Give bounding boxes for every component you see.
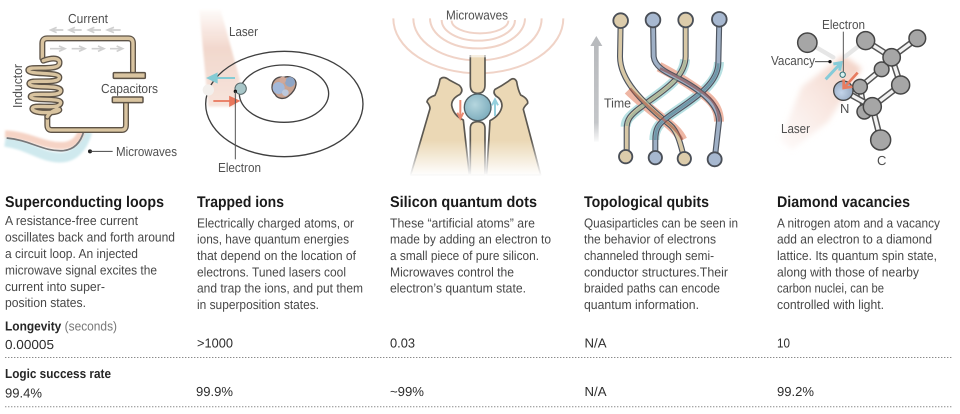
- description: carbon nuclei, can be: [777, 281, 884, 296]
- description: and trap the ions, and put them: [197, 281, 363, 296]
- carbon atoms: [798, 30, 926, 150]
- light arrows: [826, 63, 858, 88]
- label: Electron: Electron: [822, 17, 865, 32]
- description: a circuit loop. An injected: [5, 246, 138, 261]
- lattice bonds: [843, 38, 917, 140]
- description: These “artificial atoms” are: [390, 215, 535, 230]
- inductor coil: [28, 59, 61, 117]
- description: that depend on the location of: [197, 248, 356, 263]
- laser beam: [199, 10, 240, 107]
- description: quantum information.: [584, 297, 699, 312]
- description: made by adding an electron to: [390, 232, 551, 247]
- description: lattice. Its quantum spin state,: [777, 248, 937, 263]
- nitrogen atom: [834, 81, 853, 100]
- description: [777, 215, 940, 312]
- label: Inductor: Inductor: [10, 63, 25, 108]
- row heading: Longevity (seconds): [5, 318, 117, 334]
- label: Time: Time: [604, 96, 631, 110]
- ghost electron: [203, 84, 214, 96]
- electron: [235, 83, 246, 94]
- laser beam: [780, 55, 862, 150]
- values: 99.4%: [5, 386, 42, 401]
- electron pointer: [234, 90, 237, 159]
- values: [5, 384, 814, 401]
- circuit wire: [42, 38, 133, 130]
- description: [390, 215, 551, 296]
- description: [197, 215, 363, 312]
- label: Current: Current: [68, 11, 108, 26]
- current arrows: [50, 27, 123, 51]
- illustration: topological braids: [590, 12, 727, 166]
- blue strands: [653, 19, 719, 159]
- values: 0.00005: [5, 337, 54, 352]
- label: Vacancy: Vacancy: [771, 53, 815, 68]
- capacitor plates: [112, 73, 145, 103]
- heading: Topological qubits: [584, 194, 709, 211]
- values: >1000: [197, 336, 233, 351]
- illustration: diamond vacancy lattice: [771, 17, 926, 168]
- description: position states.: [5, 295, 86, 310]
- description: Microwaves control the: [390, 264, 514, 279]
- label: Laser: Laser: [229, 24, 259, 39]
- electron: [840, 32, 845, 77]
- microwave glow: [5, 131, 87, 158]
- column: silicon quantum dots: [390, 194, 551, 296]
- description: oscillates back and forth around: [5, 230, 175, 244]
- illustration: silicon quantum dot: [393, 8, 563, 176]
- description: in superposition states.: [197, 297, 319, 312]
- endpoints: [613, 12, 727, 166]
- illustration: trapped ion: [199, 10, 363, 175]
- description: conductor structures.Their: [584, 264, 729, 279]
- values: 99.2%: [777, 384, 814, 399]
- column: topological qubits: [584, 194, 738, 312]
- heading: Diamond vacancies: [777, 194, 910, 211]
- description: the behavior of electrons: [584, 232, 716, 247]
- label: Capacitors: Capacitors: [101, 81, 158, 96]
- description: along with those of nearby: [777, 264, 919, 279]
- microwaves pointer: [88, 149, 113, 153]
- description: current into super-: [5, 279, 105, 294]
- description: a small piece of pure silicon.: [390, 248, 539, 263]
- description: [5, 213, 175, 310]
- illustration: superconducting loop circuit: [5, 11, 177, 159]
- description: A resistance-free current: [5, 213, 138, 228]
- description: microwave signal excites the: [5, 262, 157, 278]
- time arrow: [590, 36, 602, 142]
- label: Laser: Laser: [781, 121, 811, 136]
- heading: Silicon quantum dots: [390, 194, 537, 211]
- heading: Superconducting loops: [5, 194, 164, 211]
- row: longevity: [5, 318, 790, 352]
- values: N/A: [584, 384, 607, 399]
- column: diamond vacancies: [777, 194, 940, 312]
- colour tints on crossings: [627, 60, 719, 140]
- description: electron’s quantum state.: [390, 281, 526, 296]
- row heading: Logic success rate: [5, 366, 111, 381]
- cooling arrow: [208, 74, 235, 82]
- values: 10: [777, 336, 790, 351]
- description: electrons. Tuned lasers cool: [197, 264, 346, 279]
- label: N: N: [840, 101, 849, 116]
- description: [584, 215, 738, 312]
- microwave arcs: [393, 18, 563, 73]
- label: Electron: Electron: [218, 160, 261, 175]
- orbits: [206, 51, 363, 157]
- values: 99.9%: [196, 384, 233, 399]
- nucleus: [272, 77, 296, 98]
- values: 0.03: [390, 336, 415, 351]
- description: A nitrogen atom and a vacancy: [777, 215, 940, 230]
- braid highlights: [626, 59, 719, 140]
- excitation arrow: [213, 97, 239, 106]
- quantum dot: [464, 94, 491, 121]
- fade: [407, 140, 547, 176]
- description: Electrically charged atoms, or: [197, 215, 355, 230]
- values: ~99%: [390, 384, 424, 399]
- heading: Trapped ions: [197, 194, 284, 211]
- values: N/A: [584, 336, 607, 351]
- faded vacancy bonds: [815, 45, 860, 57]
- vacancy pointer: [815, 60, 832, 63]
- description: add an electron to a diamond: [777, 232, 932, 247]
- description: ions, have quantum energies: [197, 232, 349, 247]
- description: Quasiparticles can be seen in: [584, 215, 738, 230]
- row: logic success rate: [5, 366, 814, 401]
- column: trapped ions: [197, 194, 363, 312]
- description: braided paths can encode: [584, 281, 720, 296]
- label: C: C: [877, 153, 886, 168]
- description: controlled with light.: [777, 297, 884, 312]
- label: Microwaves: Microwaves: [446, 8, 508, 22]
- column: superconducting loops: [5, 194, 175, 310]
- values: [5, 336, 790, 352]
- electrodes: [411, 55, 541, 175]
- tan strands: [620, 20, 686, 159]
- description: channeled through semi-: [584, 248, 714, 263]
- label: Microwaves: Microwaves: [116, 144, 177, 159]
- spin arrows: [457, 99, 498, 119]
